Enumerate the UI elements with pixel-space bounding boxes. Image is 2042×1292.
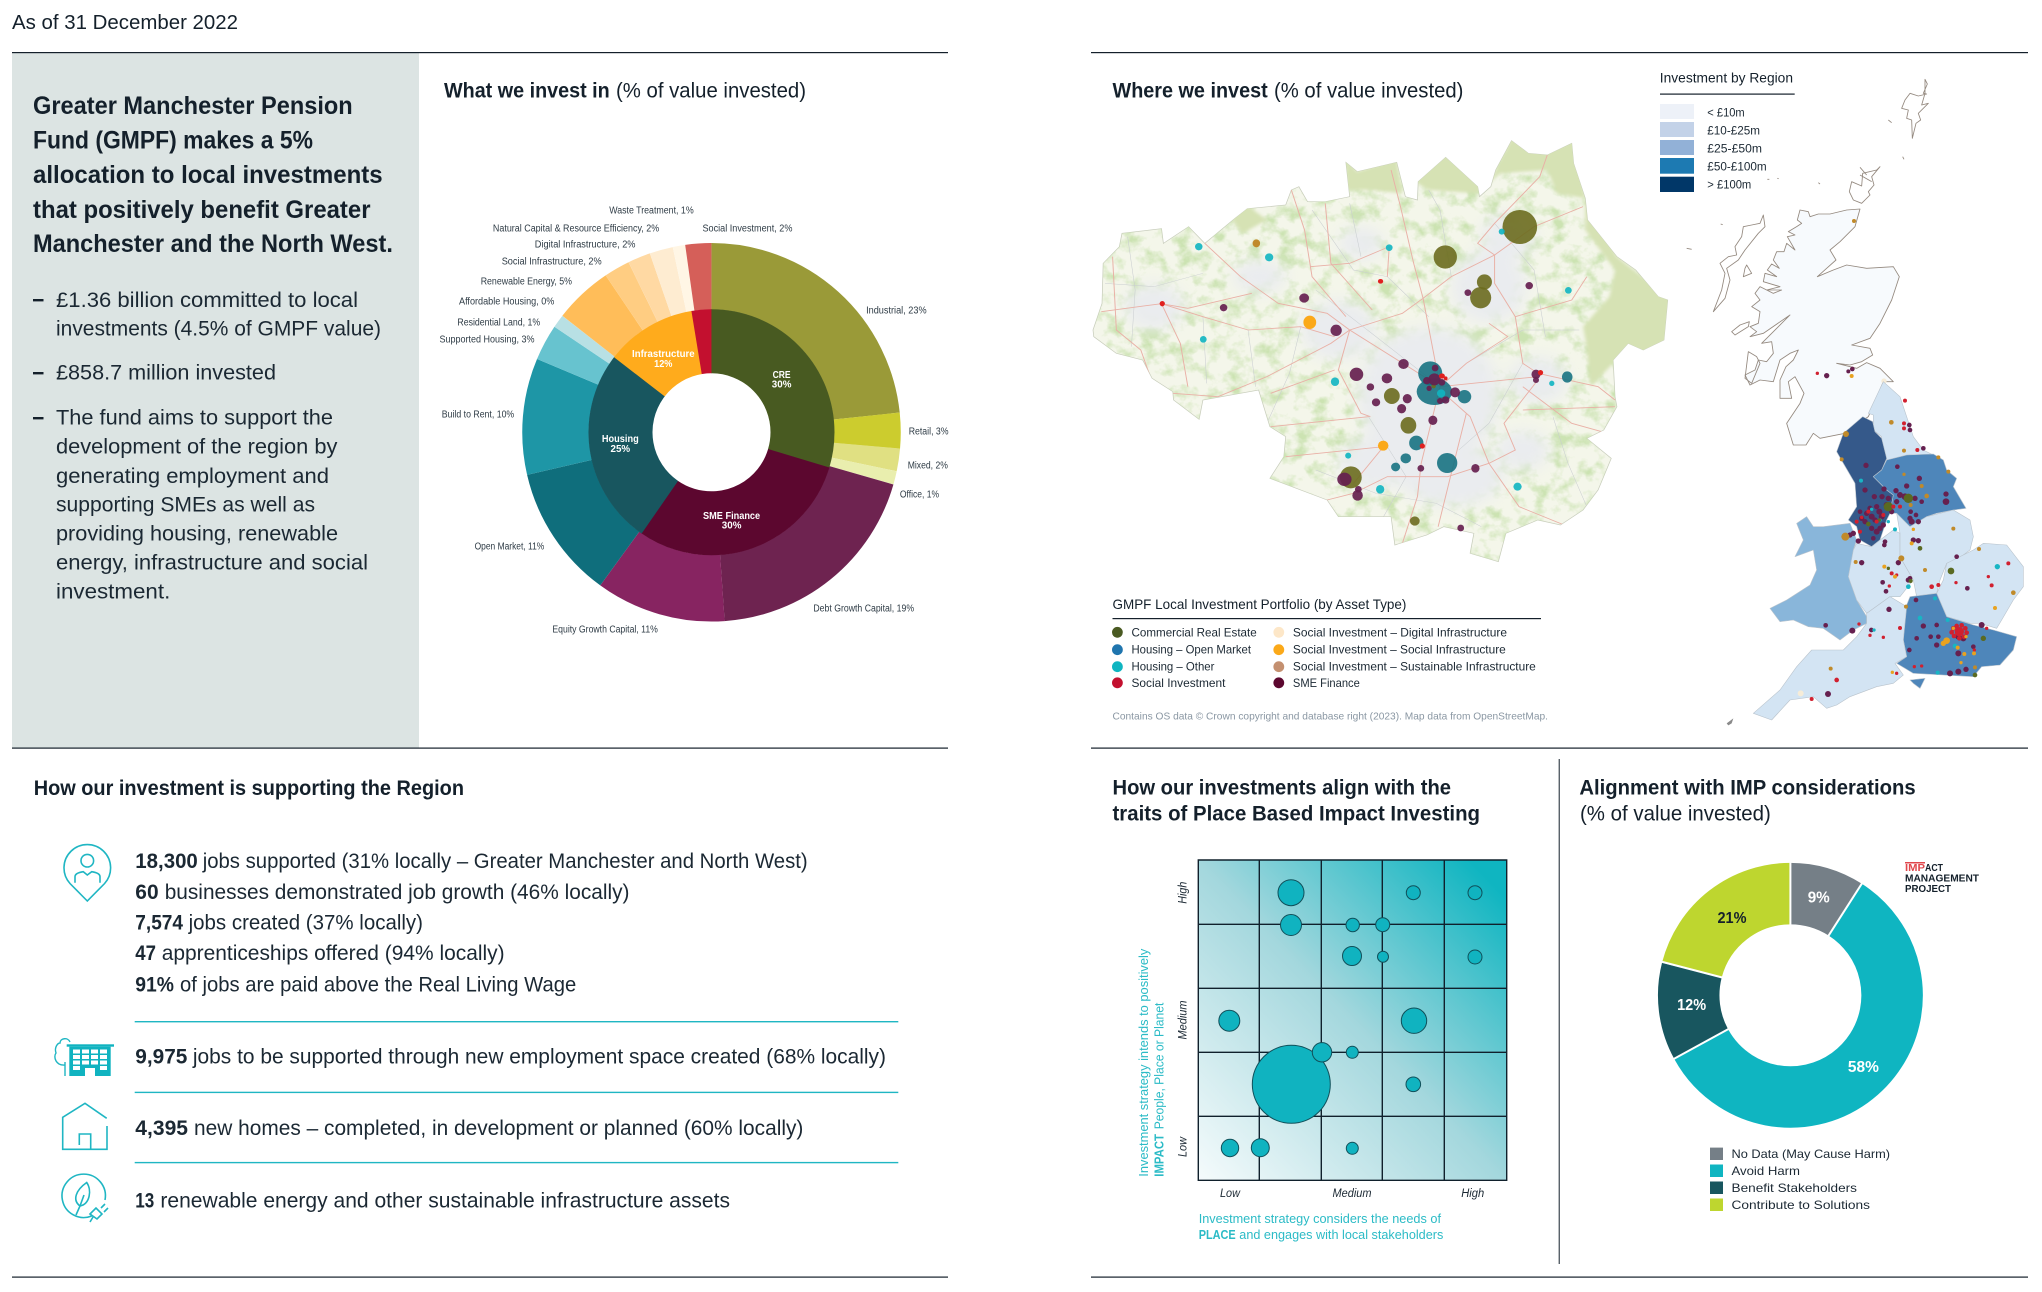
heading: what we invest in: What we invest in [444,80,610,102]
legend: IMP considerations: No Data (May Cause Harm) [1732,1147,1890,1161]
outer ring labels: Build to Rent, 10% [442,410,514,421]
icon: office building and tree [55,1039,114,1076]
heading: where we invest: Where we invest [1112,79,1268,102]
legend: GMPF local investment portfolio: SME Finance [1293,676,1360,690]
legend: GMPF local investment portfolio: Housing – Other [1132,660,1214,674]
legend: investment by region: < £10m [1707,106,1745,120]
logo: Impact Management Project: IMP [1905,863,1925,874]
Scotland and islands [1687,79,1928,445]
legend: GMPF local investment portfolio: Social Investment – Digital Infrastructure [1293,625,1507,639]
legend: IMP considerations [1710,1147,1890,1212]
outer ring labels [440,206,949,636]
legend: IMP considerations: Avoid Harm [1732,1164,1800,1178]
inner ring labels: 30% [772,378,792,390]
legend: investment by region: £10-£25m [1707,124,1760,138]
key facts heading [33,92,393,258]
inner ring labels: CRE [773,369,791,381]
social investment dots with London cluster [1810,399,2010,701]
jobs statistics [135,850,808,996]
inner ring labels: Housing [602,433,639,445]
legend: investment by region: > £100m [1707,178,1751,192]
logo: Impact Management Project [1905,862,1979,895]
icon: house [63,1103,107,1149]
matrix x axis labels: Medium [1332,1188,1372,1200]
key facts heading: allocation to local investments [33,161,383,189]
renewable assets statistic: renewable energy and other sustainable infrastructure assets [160,1190,730,1212]
employment space statistic: jobs to be supported through new employment space created (68% locally) [192,1045,886,1068]
legend: GMPF local investment portfolio: GMPF Local Investment Portfolio (by Asset Type) [1112,596,1406,612]
heading: what we invest in [444,80,806,102]
legend: IMP considerations: Benefit Stakeholders [1732,1181,1857,1195]
map markers: social infrastructure [1253,239,1388,451]
matrix y axis title: People, Place or Planet [1152,1002,1166,1129]
donut value labels: 12% [1677,997,1706,1014]
matrix x axis labels: Low [1220,1188,1241,1200]
outer ring labels: Social Investment, 2% [702,224,792,235]
matrix x axis title: and engages with local stakeholders [1239,1227,1444,1242]
key facts bullet list: £1.36 billion committed to local [56,289,358,312]
outer ring labels: Retail, 3% [909,427,949,438]
renewable assets statistic: 13 [135,1190,154,1212]
matrix x axis labels [1220,1188,1484,1200]
map markers: commercial real estate [1340,210,1537,526]
panel: regional support statistics [34,777,898,1222]
logo: Impact Management Project: PROJECT [1905,884,1951,895]
heading: alignment with IMP considerations: (% of value invested) [1580,802,1771,826]
jobs statistics: of jobs are paid above the Real Living Wage [180,973,576,996]
housing other dots [1859,479,2000,675]
sustainable infrastructure dots [1829,420,2016,671]
heading: where we invest [1112,79,1463,102]
icon: leaf with plug [62,1174,108,1222]
legend: investment by region: £25-£50m [1707,142,1762,156]
Scotland investment dots [1816,219,1887,384]
donut value labels: 21% [1718,910,1746,927]
outer ring labels: Industrial, 23% [866,306,927,317]
key facts bullet list: supporting SMEs as well as [56,493,315,516]
matrix x axis title [1199,1211,1444,1242]
legend: investment by region: Investment by Region [1660,70,1793,86]
key facts bullet list: generating employment and [56,465,329,488]
legend: GMPF local investment portfolio [1112,596,1541,690]
map markers: housing other [1195,229,1572,494]
legend: investment by region [1660,70,1795,192]
map: Greater Manchester investments [1090,130,1677,567]
donut value labels: 9% [1808,889,1830,906]
legend: IMP considerations: Contribute to Solutions [1732,1198,1870,1212]
outer ring labels: Open Market, 11% [475,542,544,553]
key facts heading: Fund (GMPF) makes a 5% [33,127,313,155]
matrix y axis labels: Medium [1177,1000,1189,1040]
outer ring labels: Debt Growth Capital, 19% [813,604,914,615]
matrix y axis labels: Low [1177,1136,1189,1157]
key facts bullet list: investments (4.5% of GMPF value) [56,318,381,340]
map markers: social investment [1160,279,1543,449]
date note: As of 31 December 2022 [12,12,238,34]
jobs statistics: jobs supported (31% locally – Greater Manchester and North West) [202,850,808,873]
donut value labels [1677,889,1879,1076]
new homes statistic: 4,395 [135,1117,188,1140]
jobs statistics: 47 [135,942,156,965]
legend: GMPF local investment portfolio: Commercial Real Estate [1132,625,1257,639]
outer ring labels: Digital Infrastructure, 2% [535,240,636,251]
heading: alignment with IMP considerations: Alignment with IMP considerations [1579,776,1916,799]
inner ring labels: 30% [722,520,742,532]
key facts bullet list: development of the region by [56,436,338,459]
outer ring labels: Affordable Housing, 0% [459,297,554,308]
outer ring labels: Mixed, 2% [908,461,948,472]
matrix y axis labels: High [1177,882,1189,904]
heading: place based impact investing: How our investments align with the [1112,776,1451,799]
jobs statistics: jobs created (37% locally) [188,912,423,934]
map credit note: Contains OS data © Crown copyright and database right (2023). Map data from OpenStreetMap. [1112,710,1548,722]
commercial real estate dots [1866,494,1986,677]
donut value labels: 58% [1848,1059,1879,1076]
key facts bullet list: energy, infrastructure and social [56,552,368,574]
outer ring labels: Renewable Energy, 5% [481,277,572,288]
chart: investment allocation sunburst donut [440,206,949,651]
digital infrastructure dots [1798,690,1804,696]
outer ring labels: Waste Treatment, 1% [609,206,694,217]
jobs statistics: businesses demonstrated job growth (46% locally) [165,881,629,904]
key facts bullet list: providing housing, renewable [56,522,338,545]
outer ring labels: Residential Land, 1% [457,318,540,329]
heading: alignment with IMP considerations [1579,776,1916,826]
matrix bubbles [1219,880,1482,1157]
outer ring labels: Social Infrastructure, 2% [502,257,602,268]
map: UK investment by region [1687,79,2023,725]
icon: person location pin [64,845,111,901]
SME finance dots [1823,423,1985,697]
legend: GMPF local investment portfolio: Housing – Open Market [1132,643,1252,657]
logo: Impact Management Project: MANAGEMENT [1905,874,1979,884]
matrix y axis labels [1177,882,1189,1157]
inner ring labels: SME Finance [703,510,760,522]
jobs statistics: 60 [135,881,159,904]
key facts bullet list: £858.7 million invested [56,362,276,384]
jobs statistics: 91% [135,973,174,996]
map markers: SME finance [1220,282,1541,531]
regional support heading: How our investment is supporting the Region [34,777,464,800]
jobs statistics: apprenticeships offered (94% locally) [162,942,505,965]
England and Wales regions [1727,382,2023,725]
heading: place based impact investing [1112,776,1480,826]
key facts heading: Greater Manchester Pension [33,92,353,120]
legend: investment by region: £50-£100m [1707,160,1767,174]
jobs statistics: 18,300 [135,850,198,873]
matrix y axis title: IMPACT [1152,1134,1166,1177]
inner ring labels: 25% [610,443,631,455]
matrix x axis title: PLACE [1199,1227,1236,1242]
outer ring labels: Supported Housing, 3% [440,335,535,346]
outer ring labels: Equity Growth Capital, 11% [552,625,658,636]
outer ring labels: Natural Capital & Resource Efficiency, 2% [493,224,659,235]
map markers: housing open market [1391,361,1572,473]
legend: GMPF local investment portfolio: Social Investment – Social Infrastructure [1293,643,1506,657]
employment space statistic: 9,975 [135,1045,188,1068]
panel: key facts [12,53,419,748]
key facts bullet list: The fund aims to support the [56,407,333,430]
logo: Impact Management Project: ACT [1925,863,1943,874]
inner ring labels: 12% [654,358,673,370]
key facts heading: that positively benefit Greater [33,196,371,224]
outer ring labels: Office, 1% [900,490,939,501]
matrix y axis title: Investment strategy intends to positively [1136,948,1151,1177]
social infrastructure dots [1882,528,1997,674]
chart: place and impact matrix [1136,860,1507,1242]
legend: GMPF local investment portfolio: Social Investment – Sustainable Infrastructure [1293,660,1536,674]
matrix y axis title [1136,948,1166,1177]
matrix x axis labels: High [1461,1188,1484,1200]
matrix x axis title: Investment strategy considers the needs of [1199,1211,1441,1226]
new homes statistic: new homes – completed, in development or planned (60% locally) [194,1117,803,1140]
heading: place based impact investing: traits of Place Based Impact Investing [1112,802,1480,826]
heading: what we invest in: (% of value invested) [616,80,806,102]
inner ring labels: Infrastructure [632,348,695,360]
key facts bullet list [33,289,381,604]
key facts heading: Manchester and the North West. [33,230,393,258]
legend: GMPF local investment portfolio: Social Investment [1132,676,1226,690]
jobs statistics: 7,574 [135,912,183,934]
inner ring labels [602,348,792,532]
chart: IMP alignment donut [1650,855,1931,1136]
key facts bullet list: investment. [56,581,170,604]
heading: where we invest: (% of value invested) [1274,79,1463,102]
